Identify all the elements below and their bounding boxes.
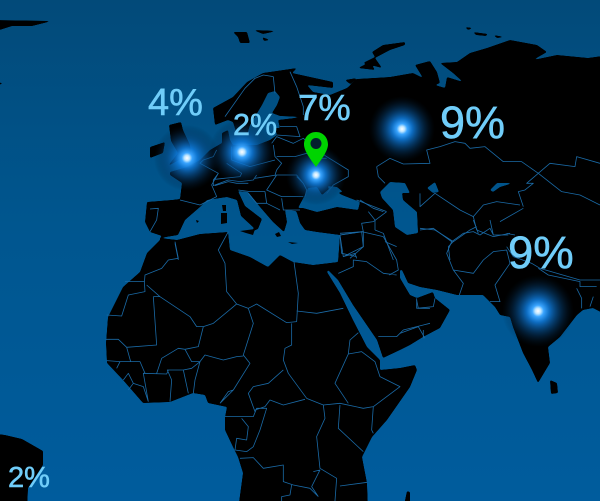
label: 2% South America: 2% bbox=[8, 462, 50, 494]
Madagascar bbox=[403, 491, 410, 501]
inland seas bbox=[160, 182, 513, 267]
glow: India bbox=[502, 275, 574, 347]
Caspian bbox=[380, 182, 418, 235]
label: 9% India: 9% bbox=[508, 227, 574, 278]
label: 9% Russia: 9% bbox=[440, 97, 505, 148]
Sri Lanka bbox=[550, 380, 558, 394]
Black Sea bbox=[298, 187, 360, 212]
label: 7%: 7% bbox=[298, 87, 351, 128]
borders: Europe bbox=[150, 72, 397, 260]
South America bbox=[0, 433, 43, 501]
Aral bbox=[427, 182, 439, 193]
label: 4%: 4% bbox=[148, 82, 203, 124]
country borders bbox=[106, 72, 600, 501]
glow: central Europe bbox=[209, 119, 275, 185]
Eurasia and Africa bbox=[106, 40, 600, 501]
glow: eastern Europe bbox=[286, 145, 346, 205]
Mediterranean islands bbox=[196, 205, 298, 244]
Arctic islands bbox=[345, 27, 505, 84]
Ireland bbox=[150, 142, 165, 158]
icon: green location pin bbox=[304, 132, 328, 167]
glow: Russia bbox=[369, 96, 435, 162]
Svalbard bbox=[233, 30, 277, 43]
Azov bbox=[327, 186, 343, 193]
Novaya Zemlya bbox=[363, 42, 405, 68]
Mediterranean bbox=[160, 191, 340, 267]
Balkhash bbox=[490, 183, 513, 192]
borders: Africa and Middle East bbox=[106, 232, 430, 501]
borders: Central Asia bbox=[340, 142, 600, 260]
Britain bbox=[168, 122, 191, 166]
glow: western Europe bbox=[154, 125, 220, 191]
Greenland tip bbox=[0, 20, 52, 88]
label: 2% central Europe: 2% bbox=[233, 108, 277, 142]
borders: South Asia and Arabia bbox=[400, 220, 600, 338]
